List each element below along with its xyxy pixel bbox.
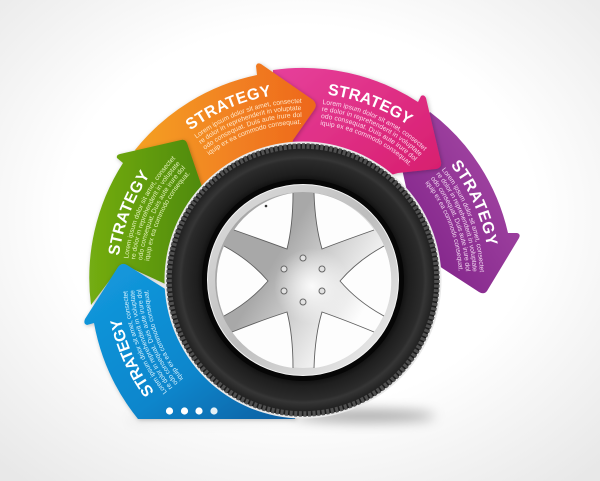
- blue heading: STRATEGY: [110, 321, 153, 396]
- tire: [164, 142, 442, 418]
- orange heading: STRATEGY: [186, 84, 269, 129]
- arrow: orange: [135, 62, 318, 186]
- purple body text: iquip ex ea commodo consequat.: [425, 180, 463, 271]
- pink body text: odo consequat. Duis aute irure dol: [321, 114, 418, 161]
- tire white edge: [164, 142, 442, 418]
- wheel rim: [202, 179, 404, 381]
- purple heading: STRATEGY: [452, 160, 498, 244]
- blue body text: iquip ex ea commodo consequat.: [144, 290, 183, 382]
- arrow: pink: [272, 66, 444, 177]
- green body text: odo consequat. Duis aute irure dol: [138, 165, 186, 260]
- blue body text: Lorem ipsum dolor sit amet, consectet: [123, 291, 167, 394]
- arrow: blue: [84, 264, 298, 422]
- pink body text: Lorem ipsum dolor sit amet, consectet: [322, 100, 427, 151]
- pink body text: iquip ex ea commodo consequat.: [320, 120, 410, 166]
- lug nuts: [281, 255, 325, 305]
- purple body text: Lorem ipsum dolor sit amet, consectet: [442, 167, 484, 272]
- blue body text: odo consequat. Duis aute irure dol: [136, 290, 178, 385]
- valve: [265, 205, 267, 207]
- pink heading: STRATEGY: [328, 84, 414, 123]
- arrow: green: [88, 138, 204, 306]
- orange body text: iquip ex ea commodo consequat.: [206, 120, 301, 156]
- orange body text: odo consequat. Duis aute irure dol: [204, 112, 302, 149]
- green heading: STRATEGY: [108, 169, 148, 255]
- rim spokes: [215, 192, 391, 368]
- green body text: re dolor in reprehenderit in voluptate: [132, 162, 180, 259]
- tire tread: [169, 146, 437, 414]
- purple body text: odo consequat. Duis aute irure dol: [431, 177, 471, 272]
- pink body text: re dolor in reprehenderit in voluptate: [322, 108, 422, 156]
- green body text: iquip ex ea commodo consequat.: [144, 172, 190, 261]
- rim outer ring: [208, 184, 398, 376]
- orange body text: Lorem ipsum dolor sit amet, consectet: [194, 98, 302, 138]
- purple body text: re dolor in reprehenderit in voluptate: [436, 172, 477, 272]
- blue body text: re dolor in reprehenderit in voluptate: [130, 290, 172, 390]
- rim windows: [217, 193, 391, 368]
- spoke shading lines: [224, 193, 384, 368]
- tire sidewall: [167, 144, 439, 416]
- pagination dots: [166, 407, 218, 415]
- ground shadow: [130, 410, 435, 422]
- arrow: purple: [402, 112, 520, 294]
- orange body text: re dolor in reprehenderit in voluptate: [199, 106, 301, 144]
- green body text: Lorem ipsum dolor sit amet, consectet: [124, 156, 176, 258]
